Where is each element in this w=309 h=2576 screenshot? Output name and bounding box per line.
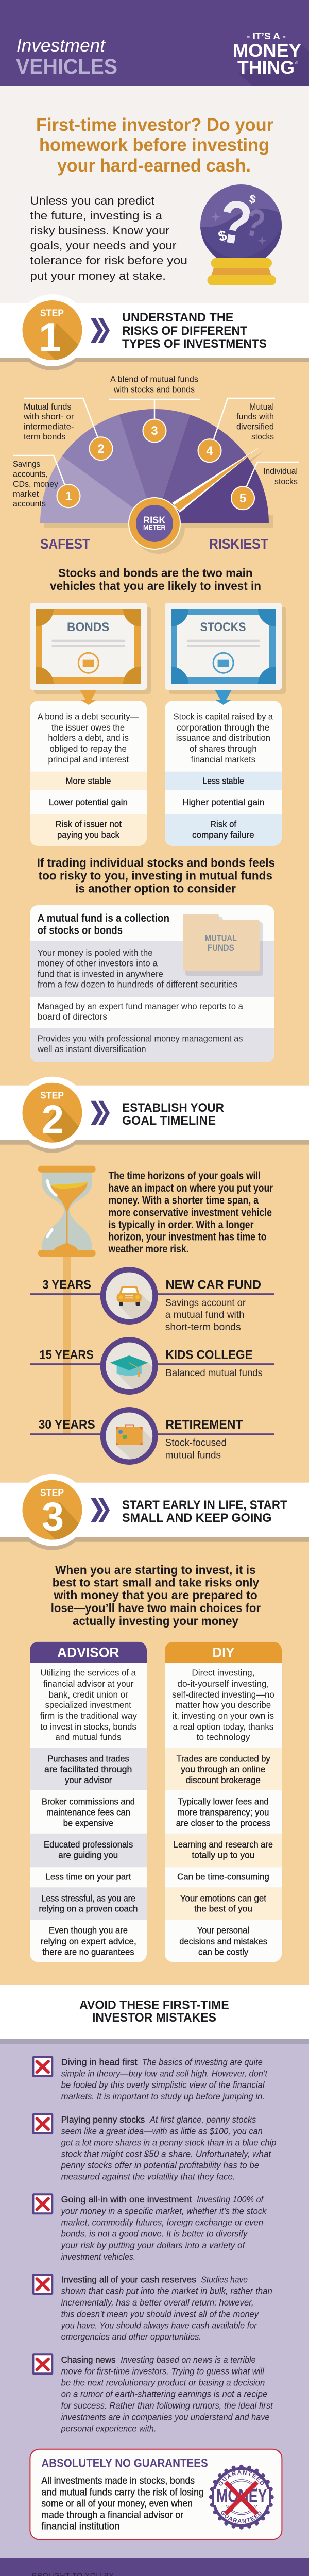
step 2 heading (122, 1101, 224, 1128)
step 1 heading: RISKS OF DIFFERENT (122, 324, 247, 338)
gauge labels: Mutual funds (24, 402, 71, 412)
gauge labels: term bonds (24, 432, 66, 442)
mutual fund description: from a few dozen to hundreds of different securities (38, 979, 237, 990)
gauge labels: accounts, (13, 470, 48, 479)
DIY traits: the best of you (194, 1904, 252, 1914)
gauge labels: Mutual (249, 402, 274, 412)
timeline row: 3 years new car fund: a mutual fund with (165, 1309, 245, 1320)
DIY traits: discount brokerage (186, 1775, 261, 1785)
panel: advisor (30, 1642, 147, 1962)
icon: crystal ball with question marks (200, 184, 282, 285)
step 3 banner: 3 (42, 1494, 64, 1539)
mutual fund heading: of stocks or bonds (38, 924, 123, 937)
icon: crystal ball with question marks: ? (214, 187, 257, 259)
advisor description: Utilizing the services of a (40, 1668, 136, 1678)
scale labels (40, 536, 268, 552)
mistake 3: going all-in (33, 2194, 267, 2262)
heading: avoid mistakes: AVOID THESE FIRST-TIME (79, 1998, 229, 2012)
mistake 4: investing all cash reserves: emergencies and other opportunities. (61, 2332, 201, 2342)
advisor traits: Educated professionals (44, 1839, 133, 1850)
step 1 banner (0, 294, 309, 371)
text: two main choices: When you are starting to invest, it is (55, 1563, 256, 1577)
heading: mutual funds option (37, 856, 275, 895)
bond traits: Lower potential gain (49, 797, 128, 807)
mutual fund description (37, 947, 243, 1054)
mutual fund heading: A mutual fund is a collection (38, 912, 169, 924)
panel: DIY (165, 1642, 282, 1962)
gauge labels: diversified (236, 422, 274, 432)
step 3 banner (0, 1474, 309, 1551)
mistake 2: playing penny stocks: penny stocks offer in potential profitability has to be (61, 2160, 260, 2170)
text: two main choices: with money that you are prepared to (54, 1588, 258, 1602)
gauge labels: A blend of mutual funds (110, 375, 198, 384)
DIY traits: Can be time-consuming (177, 1871, 269, 1882)
DIY description: it, investing on your own is (173, 1710, 274, 1721)
gauge labels: with stocks and bonds (113, 385, 195, 395)
bond traits: More stable (65, 776, 111, 786)
icon: red x (33, 2194, 52, 2213)
icon: folder: MUTUAL (205, 934, 237, 943)
gauge labels: CDs, money (13, 480, 59, 489)
bond description: obliged to repay the (49, 743, 127, 754)
title: Investment Vehicles (16, 36, 117, 78)
mistake 3: going all-in: Going all-in with one investment (61, 2194, 192, 2205)
mistake 3: going all-in: your risk by putting your dollars into a variety of (61, 2240, 246, 2250)
bond traits: paying you back (57, 829, 119, 840)
timeline row: 30 years retirement: 30 YEARS (39, 1418, 95, 1432)
gauge labels: intermediate- (24, 422, 74, 432)
icon: folder: FUNDS (208, 943, 234, 953)
icon: car (117, 1286, 142, 1306)
stock description: of shares through (190, 743, 257, 754)
callout body (41, 2475, 204, 2532)
DIY traits: you through an online (181, 1764, 266, 1774)
intro text block (30, 194, 187, 282)
callout body: financial institution (41, 2520, 119, 2532)
DIY description: self-directed investing—no (172, 1689, 274, 1700)
advisor description: and mutual funds (56, 1732, 122, 1742)
bond description: principal and interest (48, 754, 129, 765)
advisor traits: maintenance fees can (46, 1807, 130, 1817)
timeline row: 3 years new car fund: 3 YEARS (42, 1278, 91, 1292)
advisor traits: be expensive (63, 1818, 113, 1828)
heading: mutual funds option: too risky to you, investing in mutual funds (39, 869, 272, 883)
DIY traits: decisions and mistakes (179, 1936, 267, 1946)
text: time horizons: more conservative investment vehicle (108, 1207, 272, 1219)
gauge labels: stocks (251, 432, 274, 442)
mistake 5: chasing news: personal experience with. (61, 2423, 157, 2433)
timeline row: 30 years retirement: Stock-focused (165, 1437, 227, 1449)
step 2 heading: GOAL TIMELINE (122, 1114, 216, 1128)
mistake 3: going all-in: investment vehicles. (61, 2251, 135, 2262)
mistake 4: investing all cash reserves: shown that cash put into the market in bulk, rather than (61, 2286, 272, 2296)
scale labels: SAFEST (40, 536, 90, 552)
stock description: Stock is capital raised by a (174, 711, 273, 722)
panel: mutual fund (30, 905, 274, 1062)
mistake 2: playing penny stocks: seem like a great idea—with as little as $100, you can (61, 2126, 263, 2136)
mistake 1: diving in head first: Diving in head first (61, 2057, 138, 2067)
mistake 4: investing all cash reserves (33, 2275, 272, 2342)
timeline vertical bar (63, 1257, 71, 1434)
mistake 5: chasing news: Chasing news (61, 2354, 116, 2365)
icon: crystal ball with question marks: $ (248, 192, 257, 206)
numbered markers: 3 (151, 424, 158, 438)
gauge labels: accounts (13, 499, 46, 509)
advisor traits (39, 1753, 138, 1957)
text: time horizons: money. With a shorter time span, a (108, 1194, 259, 1207)
step 3 banner: STEP (40, 1488, 64, 1499)
mistake 4: investing all cash reserves: Studies have (201, 2275, 248, 2285)
mistake 4: investing all cash reserves: you have. You should always have cash available for (61, 2320, 258, 2331)
heading: mutual funds option: is another option to consider (75, 882, 236, 895)
mistake 2: playing penny stocks: At first glance, penny stocks (149, 2114, 256, 2125)
mutual fund description: Provides you with professional money management as (38, 1033, 243, 1044)
icon: red x (33, 2275, 52, 2294)
gauge labels: stocks (274, 477, 298, 486)
gauge labels: market (13, 489, 39, 499)
step 1 heading (122, 311, 267, 351)
icon: suitcase (116, 1425, 143, 1445)
DIY description: a real option today, thanks (173, 1721, 273, 1732)
mutual fund description: board of directors (38, 1011, 107, 1022)
text: two main choices (51, 1563, 261, 1628)
gauge labels: Individual (263, 467, 298, 476)
DIY traits: Learning and research are (174, 1839, 273, 1850)
mistake 3: going all-in: bonds, is not a good move. It is better to diversify (61, 2229, 248, 2239)
title: Investment Vehicles: Investment (16, 36, 106, 56)
mistake 2: playing penny stocks: get a lot more shares in a penny stock than in a blue chip (61, 2137, 277, 2147)
stock description (174, 711, 273, 765)
DIY description (172, 1668, 274, 1742)
mutual fund description: Your money is pooled with the (38, 947, 153, 958)
DIY traits: totally up to you (192, 1850, 254, 1860)
mutual fund heading (38, 912, 169, 937)
heading: stocks and bonds (50, 566, 261, 592)
stock description: issuance and distribution (176, 733, 270, 743)
mistake 2: playing penny stocks: measured against the volatility that they face. (61, 2172, 235, 2182)
text: two main choices: best to start small and take risks only (53, 1575, 259, 1589)
mistake 3: going all-in: market, commodity futures, foreign exchange or even (61, 2217, 263, 2227)
advisor description: firm is the traditional way (40, 1710, 137, 1721)
stock traits (182, 776, 265, 840)
icon: crossed-out guaranteed money seal (209, 2465, 274, 2530)
heading: stocks and bonds: Stocks and bonds are the two main (58, 566, 253, 580)
mistake 2: playing penny stocks: Playing penny stocks (61, 2114, 145, 2125)
text: time horizons (108, 1170, 273, 1255)
panel: stocks certificate (165, 603, 286, 705)
DIY description: Direct investing, (192, 1668, 254, 1678)
title: Investment Vehicles: VEHICLES (16, 55, 117, 78)
bond description (38, 711, 139, 765)
text: two main choices: actually investing your money (73, 1614, 238, 1628)
icon: red x (33, 2114, 52, 2133)
risk meter hub (128, 497, 181, 550)
mistake 5: chasing news: investments are in companies you understand and have (61, 2412, 270, 2422)
icon: crossed-out guaranteed money seal: GUARANTEED (218, 2470, 264, 2486)
mistake 4: investing all cash reserves: this doesn’t mean you should invest all of the money (61, 2309, 259, 2319)
intro heading: First-time investor? Do your (36, 115, 273, 135)
callout body: some or all of your money, even when (41, 2498, 193, 2510)
icon: folder (183, 914, 263, 976)
DIY description: to technology (197, 1732, 250, 1742)
arrow: double chevron (91, 318, 110, 343)
gauge labels: with short- or (23, 412, 74, 421)
panel: DIY: DIY (212, 1645, 234, 1660)
icon: red x (33, 2057, 52, 2076)
mistake 1: diving in head first: The basics of investing are quite (142, 2057, 263, 2067)
advisor description: financial advisor at your (43, 1679, 134, 1689)
leader lines (13, 398, 299, 487)
advisor traits: are facilitated through (44, 1764, 132, 1774)
header banner (0, 0, 309, 86)
step 1 heading: UNDERSTAND THE (122, 311, 234, 325)
timeline row: 3 years new car fund: short-term bonds (165, 1321, 241, 1333)
DIY description: do-it-yourself investing, (177, 1679, 269, 1689)
risk meter hub: METER (143, 524, 166, 531)
stock traits: company failure (192, 829, 254, 840)
text: time horizons: have an impact on where you put your (108, 1182, 273, 1194)
callout: absolutely no guarantees: ABSOLUTELY NO GUARANTEES (41, 2456, 208, 2469)
step 2 banner (0, 1077, 309, 1154)
bond description: the issuer owes the (52, 722, 125, 733)
numbered markers: 4 (206, 444, 213, 458)
icon: crossed-out guaranteed money seal: GUARANTEED (221, 2511, 262, 2523)
callout body: All investments made in stocks, bonds (41, 2475, 195, 2486)
DIY traits (174, 1753, 273, 1957)
panel: bonds details (30, 700, 147, 846)
intro text block: put your money at stake. (30, 269, 166, 282)
scale labels: RISKIEST (209, 536, 268, 552)
callout body: made through a financial advisor or (41, 2510, 183, 2521)
advisor description: to invest in stocks, bonds (40, 1721, 136, 1732)
advisor description (40, 1668, 137, 1742)
timeline row: 15 years kids college: KIDS COLLEGE (166, 1348, 253, 1362)
mistake 5: chasing news: on a rumor of earth-shattering earnings is not a recipe (61, 2389, 268, 2399)
DIY traits: Your personal (197, 1925, 249, 1936)
mistake 1: diving in head first: simple in theory—buy low and sell high. However, don’t (61, 2069, 268, 2079)
step 3 heading: SMALL AND KEEP GOING (122, 1511, 271, 1525)
DIY traits: more transparency; you (177, 1807, 269, 1817)
bond description: A bond is a debt security— (38, 711, 139, 722)
advisor description: specialized investment (45, 1700, 131, 1710)
numbered markers: 2 (97, 442, 105, 456)
gauge labels: Savings (13, 460, 40, 469)
bond description: holders a debt, and is (48, 733, 129, 743)
icon: crystal ball with question marks: ? (241, 200, 269, 247)
mistake 4: investing all cash reserves: incrementally, has a better overall return; however, (61, 2297, 253, 2308)
text: time horizons: weather more risk. (108, 1243, 189, 1255)
advisor traits: Even though you are (49, 1925, 128, 1936)
heading: mutual funds option: If trading individual stocks and bonds feels (37, 856, 275, 870)
mistake 5: chasing news: be the next revolutionary product or basing a decision (61, 2378, 265, 2388)
timeline row: 30 years retirement: RETIREMENT (166, 1418, 243, 1432)
DIY traits: Trades are conducted by (176, 1753, 270, 1764)
mutual fund description: well as instant diversification (37, 1044, 146, 1054)
intro heading: your hard-earned cash. (57, 156, 251, 176)
mistake 1: diving in head first (33, 2057, 268, 2102)
callout body: and mutual funds carry the risk of losing (41, 2486, 204, 2498)
timeline row: 30 years retirement (30, 1407, 274, 1468)
timeline row: 3 years new car fund: Savings account or (165, 1297, 246, 1309)
stock description: corporation through the (177, 722, 270, 733)
intro text block: risky business. Know your (30, 224, 170, 237)
advisor traits: Purchases and trades (48, 1753, 129, 1764)
timeline row: 15 years kids college: Balanced mutual funds (166, 1367, 263, 1379)
mistake 3: going all-in: your money in a specific market, whether it’s the stock (61, 2206, 267, 2216)
step 3 heading (122, 1498, 287, 1525)
intro text block: goals, your needs and your (30, 239, 177, 252)
logo: It's a Money Thing: ® (295, 61, 298, 65)
numbered markers (57, 419, 254, 510)
icon: hourglass (38, 1166, 96, 1257)
DIY description: matter how you describe (176, 1700, 271, 1710)
advisor traits: there are no guarantees (42, 1947, 134, 1957)
mistake 1: diving in head first: be fooled by this overly simplistic view of the financial (61, 2080, 265, 2090)
chart: risk meter gauge (13, 375, 299, 554)
text: time horizons: is typically in order. With a longer (108, 1218, 254, 1231)
panel: stocks details (165, 700, 282, 846)
numbered markers: 5 (239, 492, 246, 505)
advisor traits: relying on a proven coach (39, 1904, 138, 1914)
step 1 banner: STEP (40, 308, 64, 319)
timeline row: 3 years new car fund: NEW CAR FUND (166, 1278, 261, 1292)
timeline row: 15 years kids college (30, 1337, 274, 1396)
intro text block: tolerance for risk before you (30, 254, 187, 267)
mistake 5: chasing news: move for first-time investors. Trying to guess what will (61, 2366, 265, 2376)
needle (172, 447, 260, 513)
DIY traits: are closer to the process (176, 1818, 270, 1828)
stock traits: Less stable (202, 776, 244, 786)
gauge labels (13, 375, 298, 509)
step 2 banner: STEP (40, 1091, 64, 1101)
panel: stocks certificate: STOCKS (200, 620, 246, 634)
mutual fund description: fund that is invested in anywhere (38, 969, 163, 979)
advisor description: bank, credit union or (48, 1689, 128, 1700)
gauge labels: funds with (236, 412, 274, 421)
intro text block: the future, investing is a (30, 209, 163, 222)
panel: bonds certificate (30, 603, 151, 705)
heading: stocks and bonds: vehicles that you are likely to invest in (50, 579, 261, 592)
icon: crystal ball with question marks: $ (216, 227, 229, 245)
advisor traits: Less time on your part (45, 1871, 131, 1882)
intro heading (36, 115, 273, 176)
callout: absolutely no guarantees (29, 2448, 282, 2540)
mutual fund description: money of other investors into a (38, 958, 158, 969)
text: time horizons: The time horizons of your goals will (108, 1170, 261, 1182)
mistake 5: chasing news (33, 2354, 273, 2433)
step 2 heading: ESTABLISH YOUR (122, 1101, 224, 1115)
advisor traits: relying on expert advice, (40, 1936, 136, 1946)
advisor traits: are guiding you (58, 1850, 118, 1860)
mistake 5: chasing news: Investing based on news is a terrible (121, 2354, 256, 2365)
DIY traits: can be costly (198, 1947, 248, 1957)
bond traits: Risk of issuer not (56, 819, 122, 829)
icon: red x (33, 2354, 52, 2374)
intro heading: homework before investing (39, 135, 269, 155)
mistake 1: diving in head first: markets. It is important to study up before jumping in. (61, 2091, 265, 2102)
icon: graduation cap (110, 1355, 148, 1377)
logo: It's a Money Thing (233, 31, 309, 86)
advisor traits: Less stressful, as you are (41, 1893, 135, 1904)
logo: It's a Money Thing: MONEY (233, 41, 301, 61)
text: time horizons: horizon, your investment has time to (108, 1231, 266, 1243)
DIY traits: Typically lower fees and (178, 1797, 269, 1807)
heading: avoid mistakes: INVESTOR MISTAKES (92, 2011, 216, 2025)
stock description: financial markets (191, 754, 255, 765)
timeline row: 3 years new car fund (30, 1267, 274, 1333)
advisor traits: your advisor (65, 1775, 112, 1785)
logo: It's a Money Thing: - IT’S A - (247, 31, 286, 41)
bond traits (49, 776, 128, 840)
logo: It's a Money Thing: THING (237, 58, 295, 78)
intro text block: Unless you can predict (30, 194, 155, 207)
step 2 banner: 2 (42, 1097, 64, 1142)
text: two main choices: lose—you’ll have two main choices for (51, 1601, 261, 1615)
timeline row: 30 years retirement: mutual funds (165, 1450, 221, 1461)
mistake 3: going all-in: Investing 100% of (197, 2194, 264, 2205)
mistake 2: playing penny stocks (33, 2114, 277, 2182)
stock traits: Higher potential gain (182, 797, 265, 807)
numbered markers: 1 (65, 489, 72, 503)
panel: advisor: ADVISOR (57, 1645, 119, 1660)
mistake 5: chasing news: for success. Rather than following rumors, the ideal first (61, 2400, 273, 2411)
stock traits: Risk of (210, 819, 236, 829)
step 3 heading: START EARLY IN LIFE, START (122, 1498, 287, 1512)
advisor traits: Broker commissions and (42, 1797, 135, 1807)
timeline row: 15 years kids college: 15 YEARS (39, 1348, 94, 1362)
risk meter hub: RISK (143, 515, 166, 526)
step 1 banner: 1 (39, 314, 61, 360)
heading: avoid mistakes (79, 1998, 229, 2025)
step 1 heading: TYPES OF INVESTMENTS (122, 337, 267, 351)
icon: crossed-out guaranteed money seal: MONEY (216, 2485, 267, 2506)
panel: bonds certificate: BONDS (67, 620, 109, 634)
DIY traits: Your emotions can get (180, 1893, 266, 1904)
mistake 4: investing all cash reserves: Investing all of your cash reserves (61, 2275, 196, 2285)
mutual fund description: Managed by an expert fund manager who reports to a (38, 1001, 243, 1011)
mistake 2: playing penny stocks: stock that might cost $50 a share. Unfortunately, what (61, 2149, 271, 2159)
